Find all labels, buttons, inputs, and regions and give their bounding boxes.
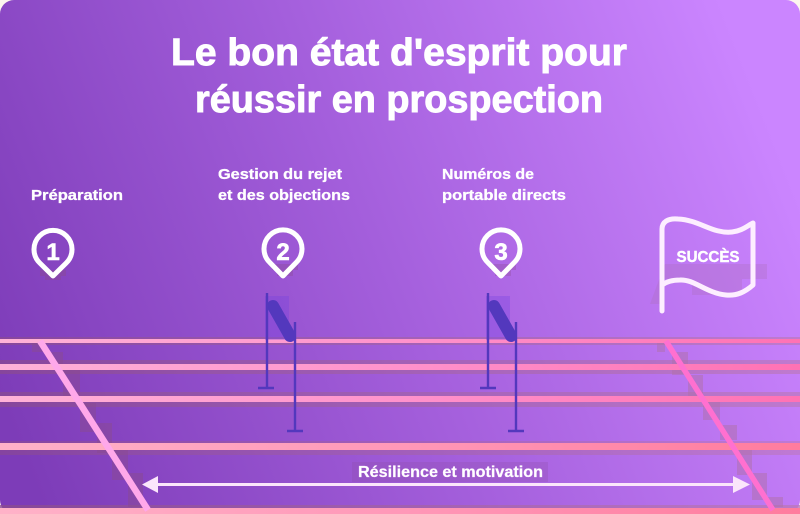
resilience label: Résilience et motivation — [358, 464, 543, 481]
step 2 label: Gestion du rejet — [218, 166, 342, 183]
step 3 label: Numéros de — [442, 166, 534, 183]
pin marker 3: 3 — [494, 239, 508, 266]
step 2 label — [218, 166, 350, 204]
pin marker 3 — [482, 230, 520, 276]
step 1 label: Préparation — [31, 187, 123, 204]
step 2 label: et des objections — [218, 187, 350, 204]
pin marker 2: 2 — [276, 239, 290, 266]
title: réussir en prospection — [195, 79, 603, 121]
hurdle 2 — [480, 293, 524, 431]
success flag — [650, 219, 767, 311]
title: Le bon état d'esprit pour — [171, 32, 627, 74]
pin marker 1: 1 — [46, 239, 60, 266]
title — [171, 32, 627, 121]
pin marker 2 — [264, 230, 302, 276]
track: running lanes — [0, 337, 800, 514]
double-headed arrow — [142, 476, 750, 493]
step 3 label — [442, 166, 566, 204]
success flag: SUCCÈS — [676, 249, 740, 266]
pin marker 1 — [34, 230, 72, 280]
step 3 label: portable directs — [442, 187, 566, 204]
hurdle 1 — [258, 293, 303, 431]
